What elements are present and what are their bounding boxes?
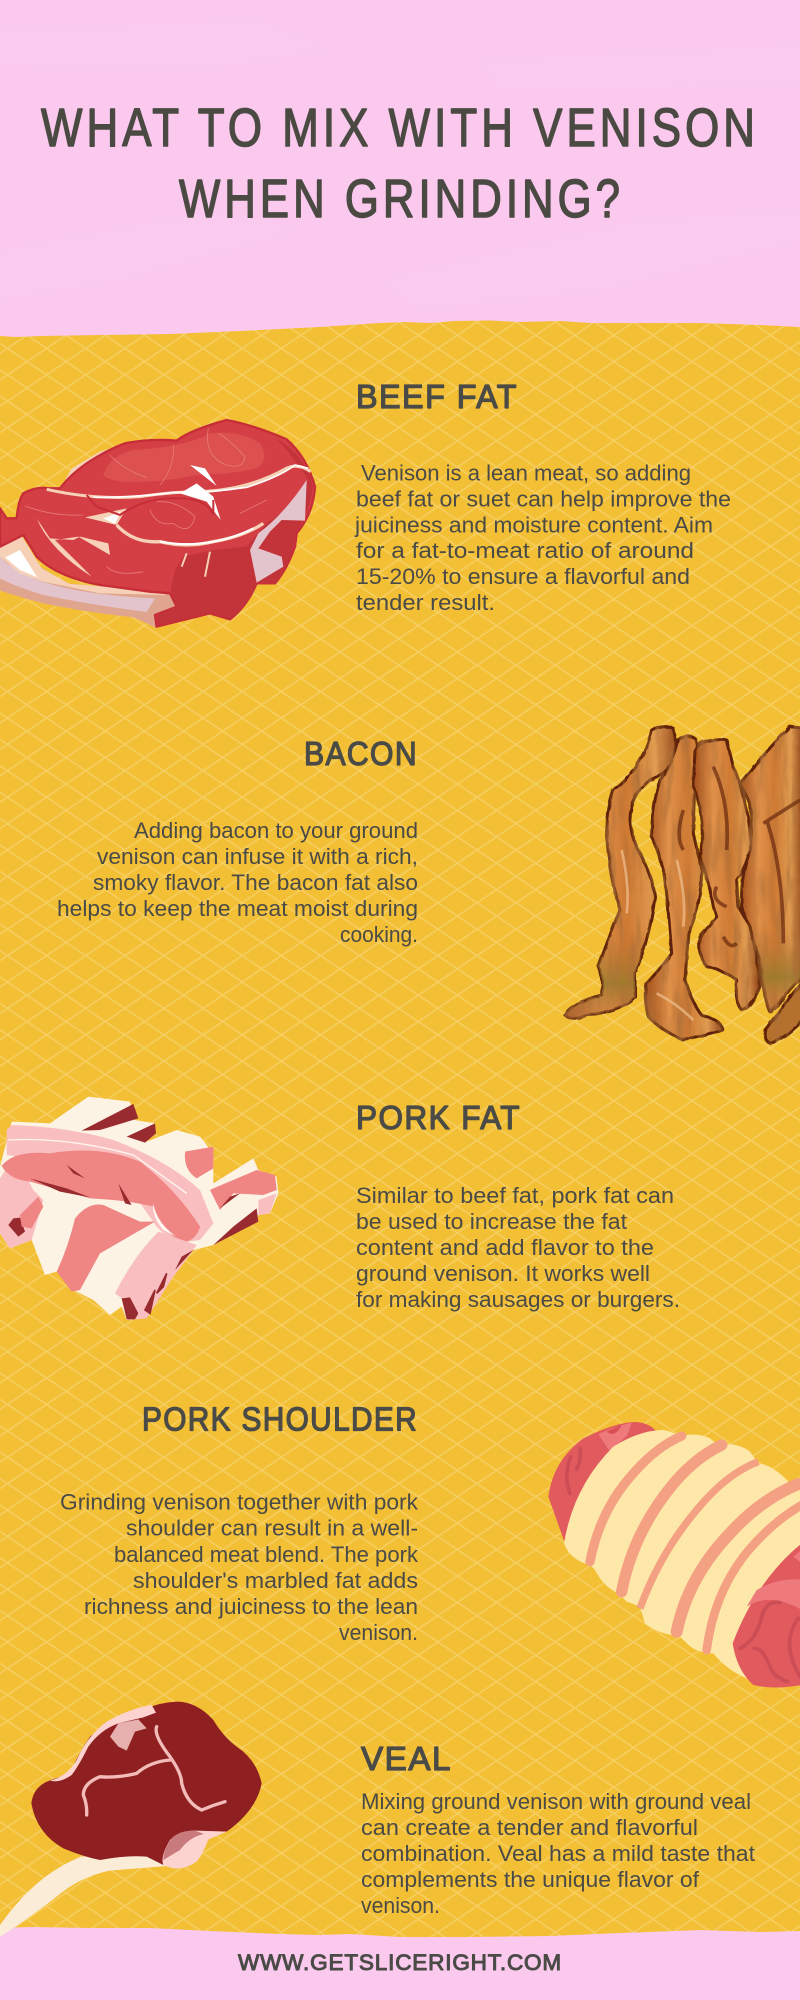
top pink banner xyxy=(0,0,800,337)
panel: veal xyxy=(361,1740,755,1918)
banner brush texture xyxy=(0,20,800,310)
icon: beef cut xyxy=(0,420,315,628)
text: veal description: venison. xyxy=(361,1893,440,1918)
text: pork shoulder description: richness and juiciness to the lean xyxy=(84,1594,418,1619)
text: pork shoulder description: shoulder's marbled fat adds xyxy=(133,1568,418,1593)
icon: pork shoulder roll xyxy=(548,1422,800,1687)
footer: website address: WWW.GETSLICERIGHT.COM xyxy=(238,1950,562,1975)
text: bacon description: cooking. xyxy=(340,922,418,947)
text: beef fat description: Venison is a lean meat, so adding xyxy=(361,461,691,486)
text: bacon description: smoky flavor. The bacon fat also xyxy=(93,870,418,895)
text: pork fat description: Similar to beef fat, pork fat can xyxy=(356,1183,674,1208)
text: beef fat description: juiciness and moisture content. Aim xyxy=(354,512,713,537)
text: beef fat description: for a fat-to-meat ratio of around xyxy=(356,538,694,563)
icon: veal cut xyxy=(0,1702,262,1937)
text: veal description xyxy=(361,1789,755,1918)
text: pork fat description: for making sausages or burgers. xyxy=(356,1287,680,1312)
text: pork fat description: ground venison. It works well xyxy=(356,1261,650,1286)
icon: pork fat ribs xyxy=(0,1097,278,1320)
text: bacon description: Adding bacon to your ground xyxy=(134,818,418,843)
text: pork shoulder description: balanced meat blend. The pork xyxy=(114,1542,419,1567)
text: pork fat description xyxy=(356,1183,680,1312)
panel: bacon xyxy=(57,735,418,947)
text: veal description: combination. Veal has a mild taste that xyxy=(361,1841,755,1866)
panel: pork fat xyxy=(356,1099,680,1312)
text: bacon description: venison can infuse it with a rich, xyxy=(97,844,418,869)
text: pork fat description: be used to increase the fat xyxy=(356,1209,627,1234)
text: beef fat description xyxy=(354,461,731,615)
bottom pink footer band xyxy=(0,1927,800,2000)
text: beef fat description: beef fat or suet can help improve the xyxy=(356,486,731,511)
heading: beef fat: BEEF FAT xyxy=(356,378,518,415)
title: WHEN GRINDING? xyxy=(179,169,624,229)
heading: bacon: BACON xyxy=(304,735,418,772)
heading: veal: VEAL xyxy=(361,1740,452,1777)
panel: beef fat xyxy=(354,378,731,615)
text: beef fat description: 15-20% to ensure a flavorful and xyxy=(356,564,690,589)
panel: pork shoulder xyxy=(60,1400,419,1645)
title xyxy=(41,98,759,229)
text: pork fat description: content and add flavor to the xyxy=(356,1235,654,1260)
heading: pork shoulder: PORK SHOULDER xyxy=(142,1400,418,1438)
text: pork shoulder description xyxy=(60,1490,419,1645)
text: bacon description: helps to keep the meat moist during xyxy=(57,896,418,921)
text: veal description: complements the unique flavor of xyxy=(361,1867,700,1892)
text: pork shoulder description: shoulder can result in a well- xyxy=(126,1516,418,1541)
text: pork shoulder description: Grinding venison together with pork xyxy=(60,1490,419,1515)
text: veal description: can create a tender and flavorful xyxy=(361,1815,698,1840)
text: bacon description xyxy=(57,818,418,947)
text: veal description: Mixing ground venison with ground veal xyxy=(361,1789,751,1814)
text: beef fat description: tender result. xyxy=(356,590,495,615)
icon: bacon strips xyxy=(565,726,800,1043)
heading: pork fat: PORK FAT xyxy=(356,1099,521,1136)
text: pork shoulder description: venison. xyxy=(339,1620,418,1645)
